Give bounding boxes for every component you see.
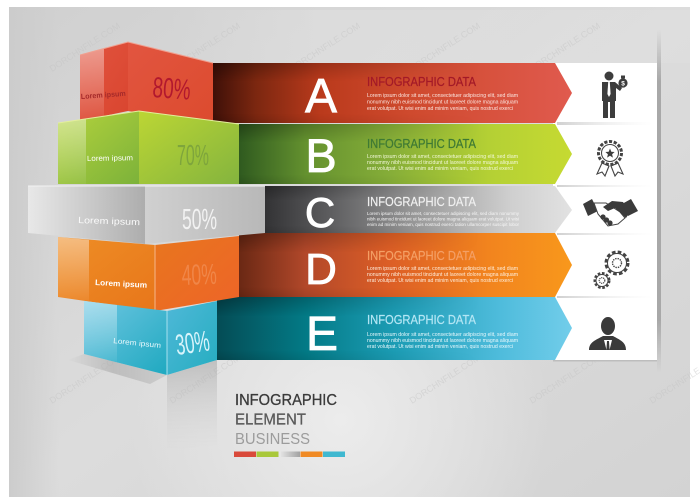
watermarks [48, 21, 700, 406]
body text B: nonummy nibh euismod tincidunt ut laoreet dolore magna aliquam [367, 160, 518, 166]
icon: businessman with money bag: $ [621, 80, 625, 88]
box: blue 30% [84, 301, 217, 375]
right side panel shadow [657, 30, 661, 372]
letter C: C [305, 189, 335, 236]
watermarks: DORCHNFILE.COM [408, 353, 482, 406]
colour legend bar [234, 452, 345, 457]
body text E: nonummy nibh euismod tincidunt ut laoreet dolore magna aliquam [367, 338, 518, 344]
body text C: nibh euismod tincidunt ut laoreet dolore magna aliquam erat volutpat. Ut wisi [367, 216, 519, 222]
watermarks: DORCHNFILE.COM [48, 21, 122, 74]
letter A: A [305, 70, 337, 123]
caption green: Lorem ipsum [87, 153, 133, 163]
body text C [367, 211, 520, 227]
white icon panel [553, 63, 657, 362]
watermarks: DORCHNFILE.COM [528, 353, 602, 406]
icon: award rosette [597, 142, 623, 176]
body text E: Lorem ipsum dolor sit amet, consectetuer adipiscing elit, sed diam [367, 332, 518, 338]
body text D [367, 266, 518, 284]
body text C: enim ad minim veniam, quis nostrud exerci tation ullamcorper suscipit lobor [367, 222, 519, 227]
heading B: INFOGRAPHIC DATA [367, 137, 477, 151]
body text E [367, 332, 518, 350]
title line 3: BUSINESS [235, 431, 310, 448]
body text C: Lorem ipsum dolor sit amet, consectetuer adipiscing elit, sed diam nonummy [367, 211, 520, 216]
caption blue: Lorem ipsum [113, 336, 161, 350]
body text A [367, 93, 518, 112]
icon: businessman with money bag [602, 72, 628, 118]
body text D: nonummy nibh euismod tincidunt ut laoreet dolore magna aliquam [367, 272, 518, 278]
letter B: B [305, 129, 337, 182]
body text A: Lorem ipsum dolor sit amet, consectetuer adipiscing elit, sed diam [367, 93, 518, 99]
ribbon A: red [213, 63, 572, 123]
caption gray: Lorem ipsum [78, 215, 140, 227]
body text E: erat volutpat. Ut wisi enim ad minim veniam, quis nostrud exerci [367, 344, 513, 350]
box: green 70% [58, 111, 239, 184]
title block [235, 392, 337, 448]
body text A: erat volutpat. Ut wisi enim ad minim veniam, quis nostrud exerci [367, 106, 513, 112]
ribbon B: green [239, 124, 572, 184]
title line 1: INFOGRAPHIC [235, 392, 337, 409]
label 30%: 30% [174, 326, 212, 362]
label 50%: 50% [182, 204, 217, 236]
icon: businessman bust [589, 317, 626, 350]
box: orange 40% [58, 236, 239, 311]
watermarks: DORCHNFILE.COM [48, 353, 122, 406]
body text B [367, 154, 518, 172]
label 70%: 70% [177, 140, 209, 172]
watermarks: DORCHNFILE.COM [288, 21, 362, 74]
heading C: INFOGRAPHIC DATA [367, 195, 477, 209]
watermarks: DORCHNFILE.COM [168, 353, 242, 406]
box: gray 50% [28, 186, 265, 244]
body text B: erat volutpat. Ut wisi enim ad minim veniam, quis nostrud exerci [367, 166, 513, 172]
icon: handshake [583, 199, 638, 226]
ribbon E: blue [217, 297, 572, 361]
heading A: INFOGRAPHIC DATA [367, 75, 477, 89]
body text D: erat volutpat. Ut wisi enim ad minim veniam, quis nostrud exerci [367, 278, 513, 284]
heading D: INFOGRAPHIC DATA [367, 249, 477, 263]
ribbon C: gray [265, 186, 572, 236]
body text D: Lorem ipsum dolor sit amet, consectetuer adipiscing elit, sed diam [367, 266, 518, 272]
letter D: D [305, 245, 337, 294]
watermarks: DORCHNFILE.COM [168, 21, 242, 74]
label 40%: 40% [181, 259, 217, 292]
icon: gears [595, 252, 628, 288]
heading E: INFOGRAPHIC DATA [367, 313, 477, 327]
caption orange: Lorem ipsum [95, 278, 147, 290]
body text A: nonummy nibh euismod tincidunt ut laoreet dolore magna aliquam [367, 100, 518, 106]
caption red: Lorem ipsum [81, 89, 126, 101]
ribbon D: orange [239, 233, 572, 297]
body text B: Lorem ipsum dolor sit amet, consectetuer adipiscing elit, sed diam [367, 154, 518, 160]
title line 2: ELEMENT [235, 412, 306, 428]
box: red 80% [80, 42, 213, 125]
watermarks: DORCHNFILE.COM [528, 21, 602, 74]
watermarks: DORCHNFILE.COM [408, 21, 482, 74]
letter E: E [306, 308, 338, 361]
floor shadows under the stack [68, 354, 217, 450]
label 80%: 80% [152, 72, 192, 107]
